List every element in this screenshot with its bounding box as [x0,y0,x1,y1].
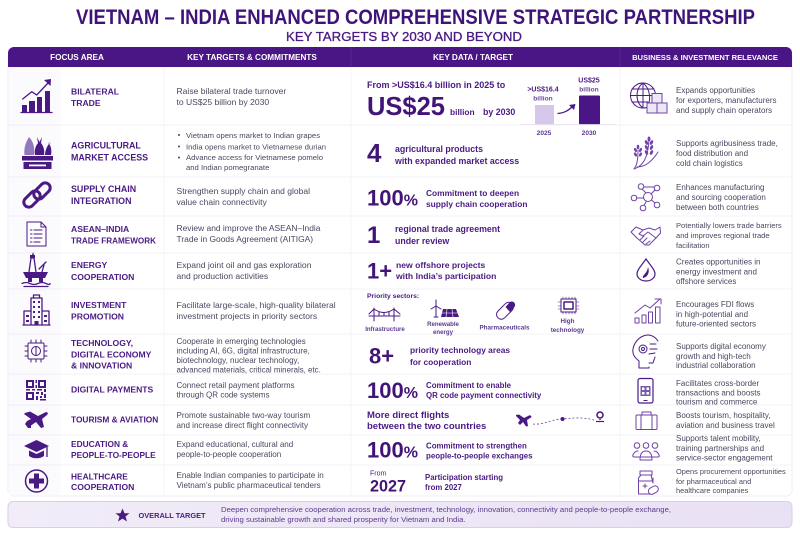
row: energy cooperation: energy investment and [676,268,757,276]
row: healthcare cooperation: COOPERATION [71,482,134,492]
icon: AI head [633,335,658,368]
row: supply chain integration: and sourcing cooperation [676,193,766,202]
icon: phone with QR [638,378,653,403]
icon: globe and boxes [630,83,667,113]
row: investment promotion: Facilitate large-scale, high-quality bilateral [176,300,336,310]
row: supply chain integration: INTEGRATION [71,196,131,206]
icon: medical cross [26,470,48,492]
row: technology and digital economy: priority technology areas [410,345,510,355]
row: ASEAN-India trade framework: regional trade agreement [395,224,500,234]
row: tourism and aviation: Boosts tourism, hospitality, [676,411,771,420]
row: ASEAN-India trade framework: Potentially lowers trade barriers [676,221,782,230]
row: healthcare cooperation: from 2027 [425,483,462,492]
row: digital payments: Facilitates cross-border [676,379,759,388]
row: education and people-to-people: people-to-people cooperation [176,450,281,459]
priority sectors [365,293,585,336]
row: technology and digital economy: 8+ [369,344,394,368]
row: agricultural market access: MARKET ACCESS [71,152,148,162]
bar chart: 2025 vs 2030: >US$16.4 [527,86,559,94]
row: bilateral trade [21,78,776,137]
row: tourism and aviation: TOURISM & AVIATION [71,415,158,425]
icon: graduation cap [24,440,49,458]
row: supply chain integration: SUPPLY CHAIN [71,184,136,194]
row: digital payments: 100% [367,378,418,403]
row: healthcare cooperation: for pharmaceutical and [676,477,751,486]
row: agricultural market access: Supports agribusiness trade, [676,139,778,148]
row: energy cooperation: Creates opportunities in [676,258,760,266]
row: tourism and aviation: More direct flights [367,410,449,421]
row: agricultural market access: 4 [367,138,382,168]
table header [8,47,792,67]
subtitle: KEY TARGETS BY 2030 AND BEYOND [286,30,522,44]
row: education and people-to-people: EDUCATION & [71,439,128,449]
icon: growth chart [21,79,52,112]
row: bilateral trade: and supply chain operators [676,106,772,115]
row: ASEAN-India trade framework [27,221,782,250]
row: ASEAN-India trade framework: Review and improve the ASEAN–India [176,223,321,233]
row: energy cooperation: with India’s participation [395,271,496,281]
panel: overall target: Deepen comprehensive cooperation across trade, investment, technology, innovation, connectivity and people-to-people exchange, [221,505,671,514]
icon: people group [633,443,659,460]
row: digital payments: QR code payment connectivity [426,391,542,400]
table header: KEY TARGETS & COMMITMENTS [187,53,317,62]
priority sectors: Pharmaceuticals [479,324,530,332]
row: energy cooperation: 1+ [367,258,392,284]
row: agricultural market access: agricultural products [395,144,483,154]
icon: microchip [558,297,579,314]
row: digital payments: tourism and commerce [676,398,758,406]
row: ASEAN-India trade framework: TRADE FRAMEWORK [71,236,156,246]
row: education and people-to-people: Expand educational, cultural and [176,440,293,449]
table header: BUSINESS & INVESTMENT RELEVANCE [632,53,778,62]
row: education and people-to-people [24,434,773,462]
row: ASEAN-India trade framework: under review [395,236,449,246]
row: agricultural market access [22,131,778,172]
row: education and people-to-people: 100% [367,438,418,462]
row: technology and digital economy: growth and high-tech [676,352,751,361]
row: digital payments: DIGITAL PAYMENTS [71,385,154,395]
row: technology and digital economy [25,335,766,374]
row: investment promotion: in high-potential and [676,310,748,319]
bar chart: 2025 vs 2030: US$25 [578,78,600,84]
row: supply chain integration: between both countries [676,203,759,212]
icon: flight route [516,412,604,426]
row: healthcare cooperation: 2027 [370,478,406,496]
icon: AI chip [25,340,47,362]
row: energy cooperation: new offshore projects [396,260,486,270]
priority sectors: Priority sectors: [367,293,419,300]
icon: produce crate [22,137,53,169]
icon: medicine bottle [638,471,660,496]
icon: QR code [26,380,46,400]
row: bilateral trade: Raise bilateral trade turnover [176,86,286,96]
panel: overall target: driving sustainable growth and shared prosperity for Vietnam and India. [221,515,466,524]
row: bilateral trade: Expands opportunities [676,86,755,95]
icon: pill [495,300,515,321]
row: tourism and aviation: between the two countries [367,421,486,432]
row: healthcare cooperation: From [370,470,386,478]
row: tourism and aviation: aviation and business travel [676,421,775,430]
row: digital payments: Commitment to enable [426,381,512,390]
key data: trade target: by 2030 [483,107,515,117]
row: technology and digital economy: & INNOVATION [71,360,132,370]
bullet list [178,131,326,172]
bar chart: 2025 vs 2030: 2025 [537,130,552,137]
row: education and people-to-people: PEOPLE-TO-PEOPLE [71,450,156,460]
row: technology and digital economy: biotechnology, nuclear technology, [176,356,299,365]
row: technology and digital economy: TECHNOLOGY, [71,338,133,348]
row: digital payments: through QR code systems [176,390,270,400]
icon: network [631,184,660,211]
icon: city buildings [23,295,50,325]
row: supply chain integration: Strengthen supply chain and global [176,186,310,196]
row: technology and digital economy: advanced materials, critical minerals, etc. [176,366,321,374]
row: agricultural market access: food distribution and [676,149,748,158]
row: education and people-to-people: Supports talent mobility, [676,434,761,443]
key data: trade target [367,80,515,121]
key data: trade target: US$25 [367,93,445,121]
bar chart: 2025 vs 2030 [520,78,616,137]
row: supply chain integration: Enhances manufacturing [676,183,764,192]
row: technology and digital economy: for cooperation [410,357,471,367]
icon: document [27,222,46,246]
row: digital payments: transactions and boosts [676,388,760,398]
row: education and people-to-people: people-to-people exchanges [426,452,533,460]
row: healthcare cooperation: healthcare companies [676,486,749,495]
row: energy cooperation: and production activities [176,271,268,281]
row: ASEAN-India trade framework: facilitation [676,241,710,250]
panel: overall target [8,502,792,528]
row: investment promotion: future-oriented sectors [676,320,756,328]
row: healthcare cooperation: HEALTHCARE [71,472,128,482]
row: technology and digital economy: DIGITAL ECONOMY [71,350,152,360]
icon: oil drop [637,259,655,281]
row: energy cooperation: offshore services [676,277,736,286]
bullet list: India opens market to Vietnamese durian [186,142,326,152]
row: agricultural market access: cold chain logistics [676,159,743,168]
table header: FOCUS AREA [50,53,104,62]
icon: handshake [631,227,660,245]
row: supply chain integration [22,181,766,212]
row: bilateral trade: to US$25 billion by 2030 [176,97,269,107]
row: education and people-to-people: training partnerships and [676,444,764,453]
row: investment promotion: investment projects in priority sectors [176,311,317,321]
row: supply chain integration: supply chain cooperation [426,199,527,209]
row: investment promotion: PROMOTION [71,312,124,322]
row: supply chain integration: value chain connectivity [176,197,267,207]
bullet list: and Indian pomegranate [186,163,269,172]
bar chart: 2025 vs 2030: 2030 [582,130,597,137]
bullet list: Vietnam opens market to Indian grapes [186,131,320,140]
row: healthcare cooperation: Vietnam’s public pharmaceutical tenders [176,481,321,490]
row: ASEAN-India trade framework: 1 [367,222,380,249]
priority sectors: energy [433,329,454,336]
row: bilateral trade: BILATERAL [71,86,119,96]
priority sectors: High [560,318,575,325]
priority sectors: Infrastructure [365,326,405,333]
row: education and people-to-people: service-sector engagement [676,454,773,462]
row: tourism and aviation: Promote sustainable two-way tourism [176,411,311,420]
row: digital payments [26,378,760,406]
row: agricultural market access: AGRICULTURAL [71,140,141,150]
row: energy cooperation: Expand joint oil and gas exploration [176,260,312,270]
icon: suitcase [636,412,657,430]
key data: trade target: From >US$16.4 billion in 2025 to [367,80,506,90]
row: technology and digital economy: Cooperate in emerging technologies [176,337,306,346]
row: tourism and aviation [24,410,775,432]
row: ASEAN-India trade framework: Trade in Goods Agreement (AITIGA) [176,234,313,244]
icon: growth outline [635,299,661,323]
row: education and people-to-people: Commitment to strengthen [426,442,527,450]
row: bilateral trade: for exporters, manufacturers [676,96,776,105]
bar chart: 2025 vs 2030: billion [533,96,553,102]
row: energy cooperation: COOPERATION [71,272,134,282]
row: technology and digital economy: Supports digital economy [676,342,766,351]
row: investment promotion: INVESTMENT [71,300,127,310]
row: investment promotion [23,293,756,336]
row: digital payments: Connect retail payment platforms [176,381,295,390]
icon: chain link [22,181,52,209]
icon: bridge [369,308,400,321]
panel: overall target: OVERALL TARGET [138,511,206,520]
row: supply chain integration: 100% [367,186,418,210]
key data: trade target: billion [450,107,475,117]
row: agricultural market access: with expanded market access [394,156,519,166]
bullet list: Advance access for Vietnamese pomelo [186,153,323,162]
row: bilateral trade: TRADE [71,98,101,108]
priority sectors: Renewable [427,321,460,328]
row: ASEAN-India trade framework: ASEAN–INDIA [71,224,129,234]
row: tourism and aviation: and increase direct flight connectivity [176,421,308,430]
row: ASEAN-India trade framework: and improves regional trade [676,231,770,240]
icon: wind and solar [431,300,459,317]
icon: offshore rig [22,252,50,286]
row: healthcare cooperation [26,467,786,496]
icon: wheat [633,136,658,169]
row: supply chain integration: Commitment to deepen [426,188,519,198]
row: energy cooperation [22,252,760,286]
row: healthcare cooperation: Enable Indian companies to participate in [176,471,324,480]
row: technology and digital economy: industrial collaboration [676,361,756,370]
row: investment promotion: Encourages FDI flows [676,300,754,309]
row: energy cooperation: ENERGY [71,260,108,270]
icon: star [116,508,130,522]
row: healthcare cooperation: Opens procurement opportunities [676,467,786,476]
row: technology and digital economy: including AI, 6G, digital infrastructure, [176,346,310,356]
row: healthcare cooperation: Participation starting [425,473,503,482]
bar chart: 2025 vs 2030: billion [579,86,599,94]
table header: KEY DATA / TARGET [433,53,513,62]
icon: airplane [24,412,48,428]
priority sectors: technology [551,327,585,334]
